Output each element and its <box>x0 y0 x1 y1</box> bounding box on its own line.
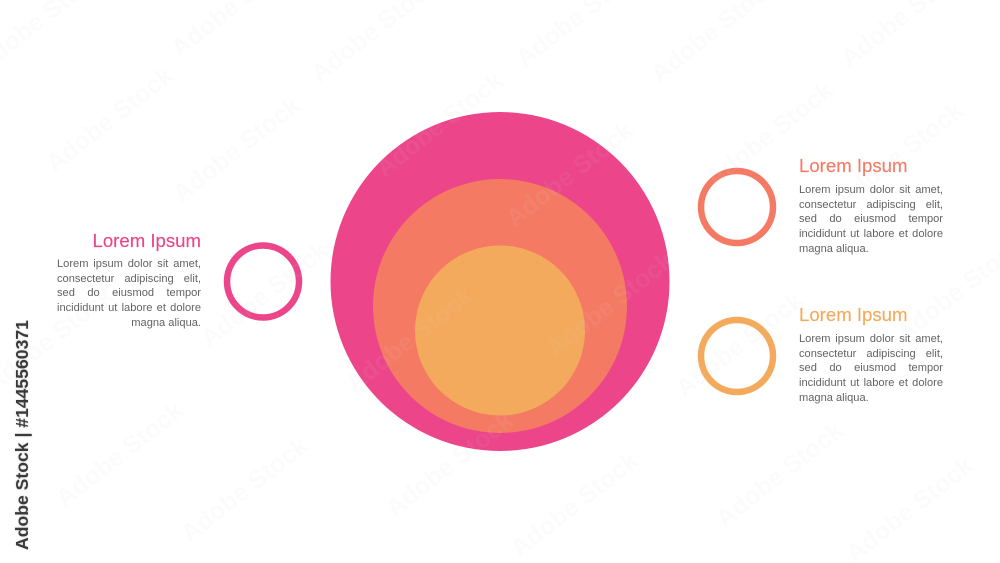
top right body text: Lorem ipsum dolor sit amet, <box>799 184 943 196</box>
watermark pattern: Adobe Stock <box>371 67 509 183</box>
bottom right text block <box>799 304 943 404</box>
bottom right body text: sed do eiusmod tempor <box>799 362 943 374</box>
watermark pattern: Adobe Stock <box>341 282 479 398</box>
watermark pattern: Adobe Stock <box>831 97 969 213</box>
watermark pattern: Adobe Stock <box>41 62 179 178</box>
ring: pink <box>227 246 299 318</box>
bottom right heading: Lorem Ipsum <box>799 304 908 325</box>
ring: coral <box>701 171 773 243</box>
bottom right body text: Lorem ipsum dolor sit amet, <box>799 333 943 345</box>
stock id label: Adobe Stock | #1445560371 <box>12 320 32 549</box>
left text block <box>57 230 201 329</box>
inner orange circle <box>415 246 585 416</box>
watermark pattern: Adobe Stock <box>196 237 334 353</box>
top right body text: magna aliqua. <box>799 243 869 255</box>
bottom right body text: magna aliqua. <box>799 392 869 404</box>
outer pink circle <box>330 112 670 451</box>
bottom right body text: consectetur adipiscing elit, <box>799 348 943 360</box>
top right body text: sed do eiusmod tempor <box>799 213 943 225</box>
watermark pattern: Adobe Stock <box>711 417 849 533</box>
watermark pattern: Adobe Stock <box>671 287 809 403</box>
middle coral circle <box>373 179 627 433</box>
bottom right body text <box>799 333 943 404</box>
watermark pattern: Adobe Stock <box>541 247 679 363</box>
top right body text: consectetur adipiscing elit, <box>799 199 943 211</box>
left body text <box>57 258 201 329</box>
watermark pattern: Adobe Stock <box>168 92 306 208</box>
top right body text: incididunt ut labore et dolore <box>799 228 943 240</box>
watermark pattern: Adobe Stock <box>51 397 189 513</box>
left body text: magna aliqua. <box>131 317 201 329</box>
watermark pattern: Adobe Stock <box>701 77 839 193</box>
left body text: Lorem ipsum dolor sit amet, <box>57 258 201 270</box>
top right text block <box>799 155 943 255</box>
watermark pattern: Adobe Stock <box>381 407 519 523</box>
bottom right body text: incididunt ut labore et dolore <box>799 377 943 389</box>
watermark pattern: Adobe Stock <box>176 432 314 548</box>
left body text: sed do eiusmod tempor <box>57 287 201 299</box>
ring: orange <box>701 320 773 392</box>
watermark pattern: Adobe Stock <box>506 447 644 563</box>
watermark pattern: Adobe Stock <box>501 117 639 233</box>
left body text: consectetur adipiscing elit, <box>57 273 201 285</box>
top right body text <box>799 184 943 255</box>
left heading: Lorem Ipsum <box>92 230 201 251</box>
left body text: incididunt ut labore et dolore <box>57 302 201 314</box>
top right heading: Lorem Ipsum <box>799 155 908 176</box>
